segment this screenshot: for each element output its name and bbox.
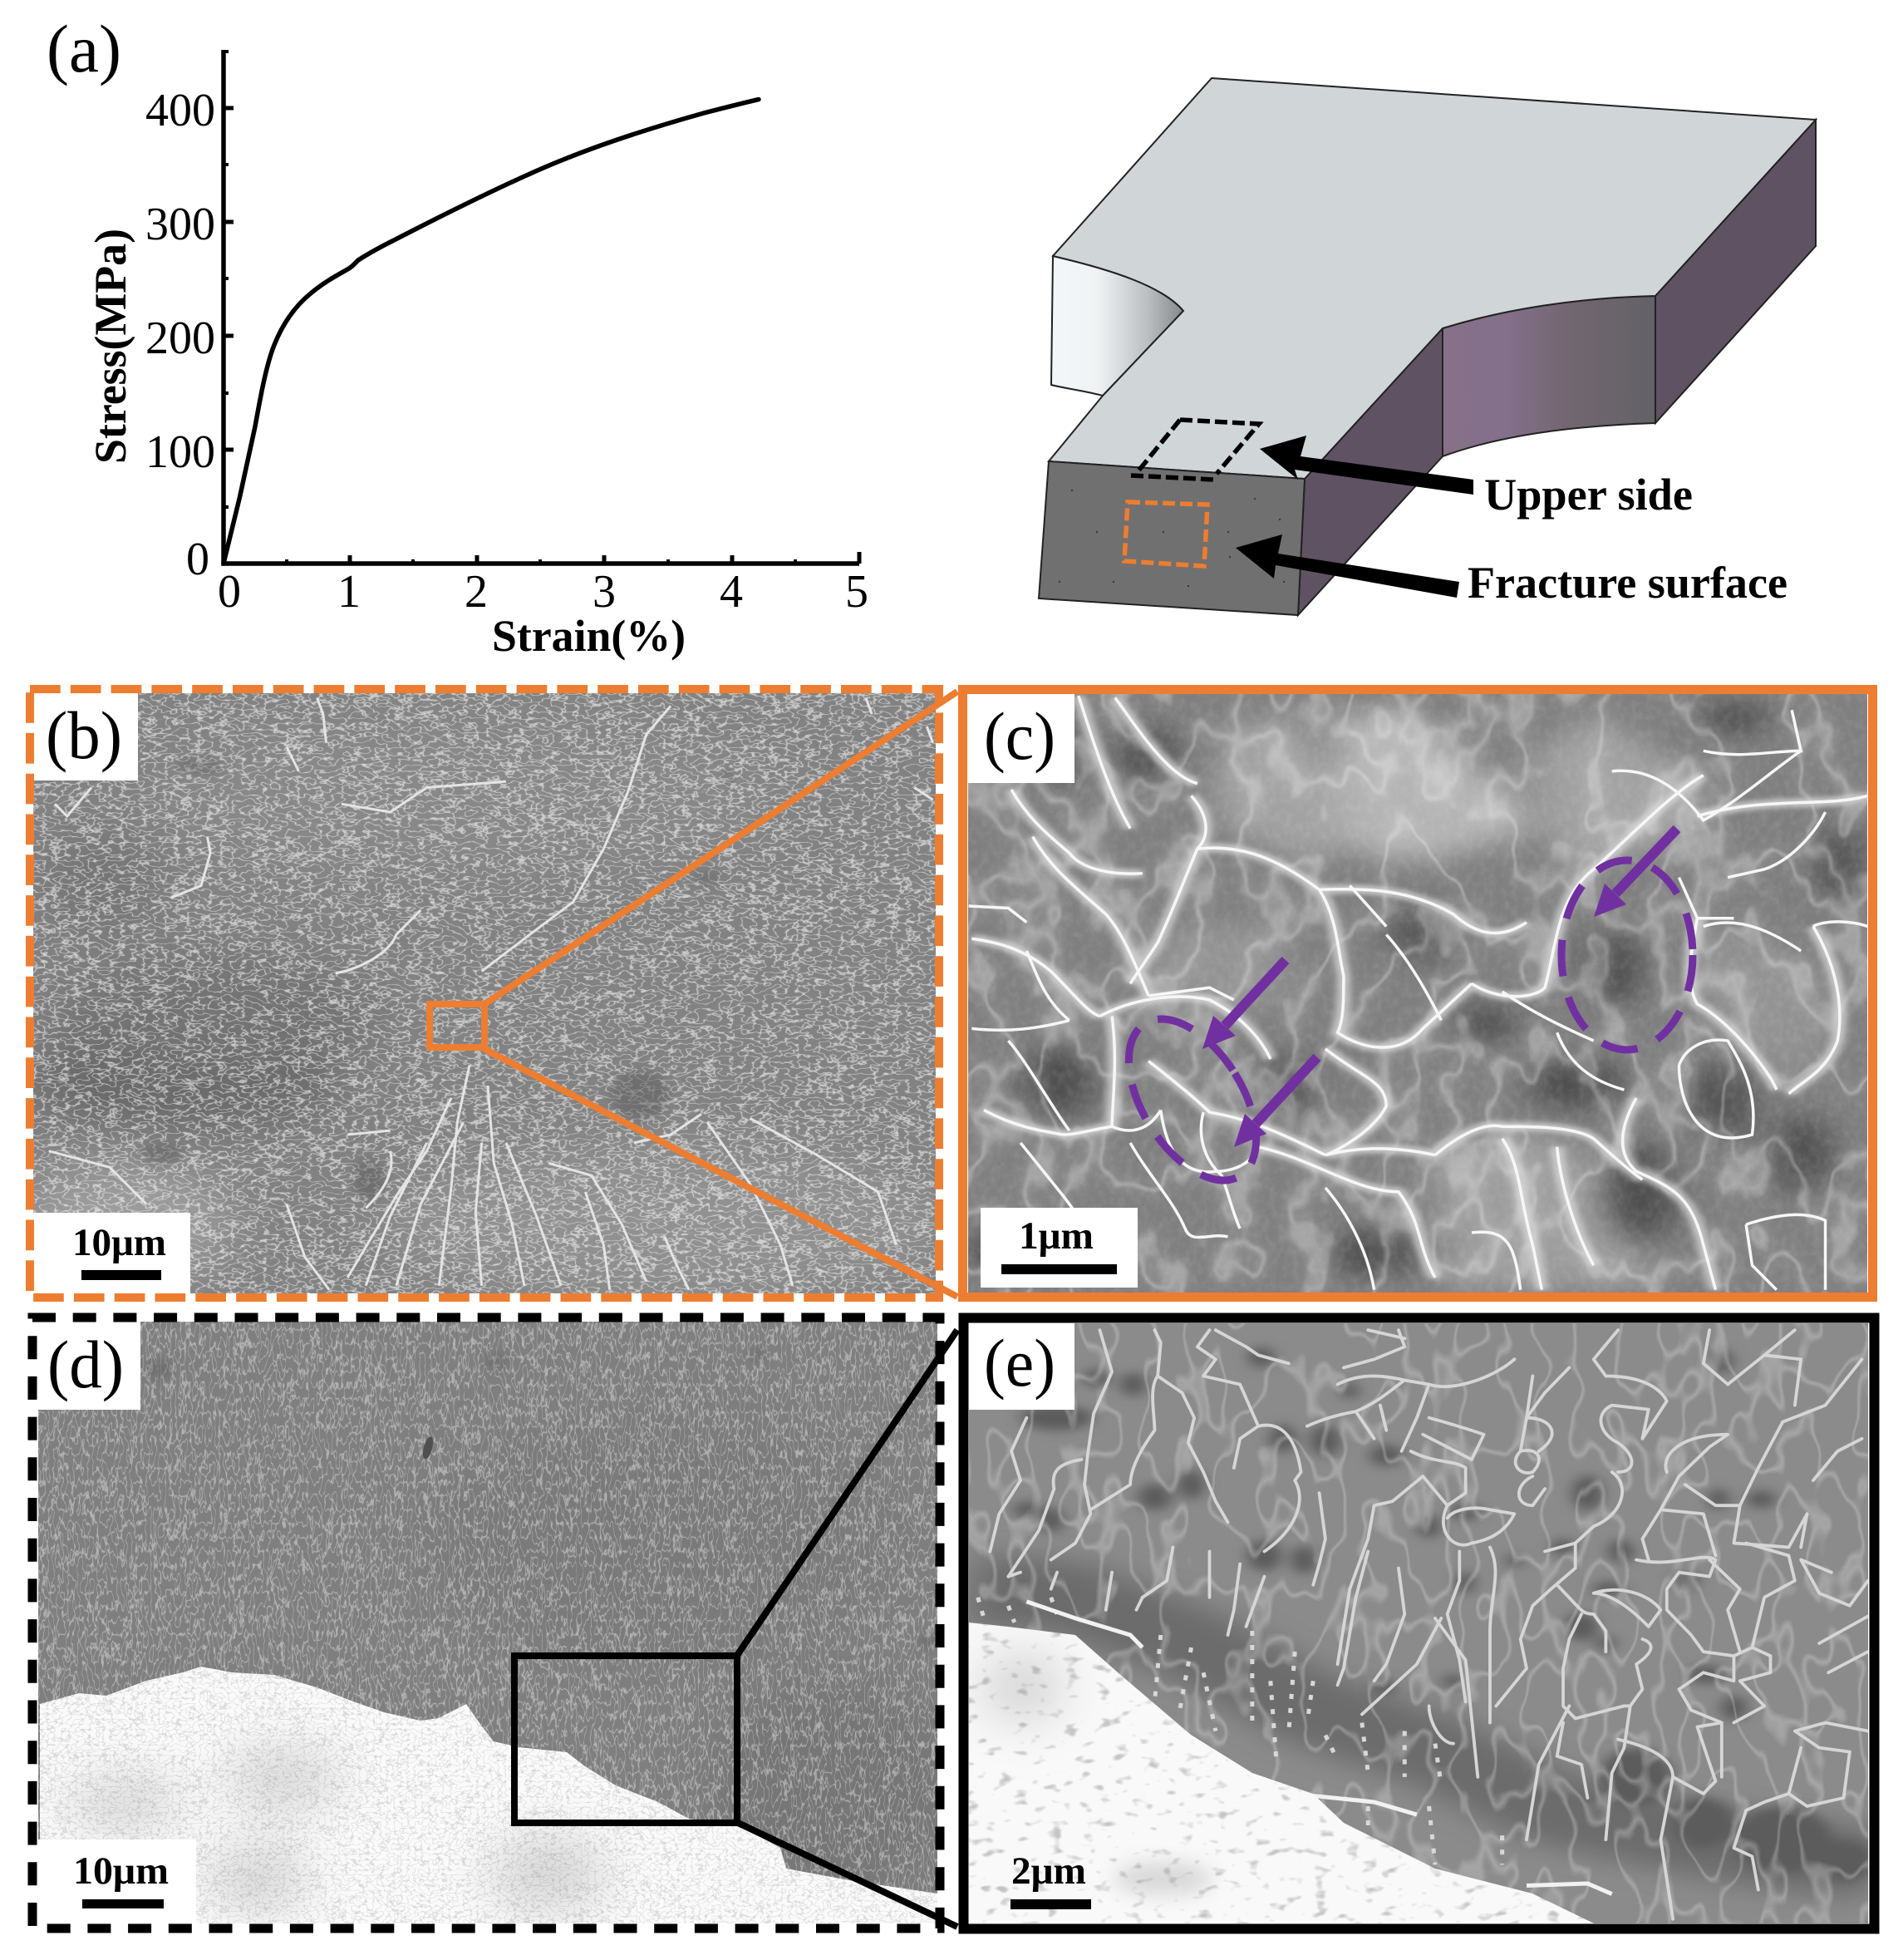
y axis tick labels: 400	[145, 85, 215, 136]
orange zoom connector lines	[484, 692, 957, 1297]
label box (c): (c)	[984, 698, 1055, 774]
x axis tick labels: 5	[845, 566, 868, 618]
y axis tick labels: 100	[145, 426, 215, 478]
fracture region texture	[38, 1654, 937, 1923]
black zoom connector lines	[738, 1330, 957, 1927]
panel: stress-strain chart	[47, 11, 868, 661]
dark band near fracture edge	[971, 1589, 1874, 1864]
droplet rows	[978, 1598, 1502, 1864]
upper side dashed region	[1131, 420, 1259, 480]
scale bar b: 10μm	[72, 1221, 166, 1264]
y axis title: Stress(MPa)	[86, 229, 135, 464]
arrow: fracture surface	[1236, 534, 1459, 598]
panel: SEM image c	[962, 690, 1873, 1297]
x axis tick labels	[218, 566, 868, 618]
black zoom box	[514, 1656, 737, 1823]
dark blotches	[1013, 1347, 1874, 1881]
dashed black frame d	[32, 1317, 940, 1928]
fine surface grain	[968, 694, 1867, 1293]
x axis tick labels: 2	[465, 566, 488, 618]
bright ridges	[49, 697, 933, 1290]
organic eutectic network	[969, 1323, 1868, 1923]
scale bar c	[981, 1208, 1138, 1288]
right side face	[1655, 120, 1816, 423]
label box (b): (b)	[46, 697, 122, 773]
x axis title: Strain(%)	[492, 611, 686, 661]
curved side wall	[1443, 296, 1655, 456]
solid black frame e	[964, 1318, 1875, 1928]
x axis tick labels: 4	[720, 566, 743, 618]
annotations: purple arrows	[1202, 829, 1677, 1147]
SEM texture c	[966, 694, 1868, 1293]
orange zoom box	[430, 1004, 484, 1047]
organic cell network	[968, 694, 1867, 1293]
notch wall	[1051, 256, 1183, 396]
scale bar d	[38, 1839, 196, 1923]
y axis tick labels: 200	[145, 313, 215, 364]
solid orange frame c	[962, 690, 1873, 1297]
label box (d): (d)	[47, 1327, 124, 1402]
bright fracture region	[40, 1667, 937, 1923]
panel: 3D specimen diagram	[1039, 78, 1816, 615]
small dark marks	[421, 1436, 435, 1460]
eutectic network	[990, 1330, 1868, 1919]
dashed orange frame b	[30, 689, 939, 1298]
SEM texture d	[38, 1322, 956, 1923]
y axis tick labels: 0	[186, 534, 209, 585]
scale bar d: 10μm	[73, 1849, 169, 1893]
panel: SEM image b	[17, 689, 957, 1298]
label box (e): (e)	[984, 1325, 1055, 1401]
label box (b)	[33, 693, 138, 781]
x axis tick labels: 1	[337, 566, 361, 618]
panel label (a): (a)	[47, 11, 121, 86]
panel: SEM image d	[32, 1317, 957, 1928]
label: fracture surface: Fracture surface	[1468, 558, 1787, 608]
ridge glow	[971, 696, 1868, 1290]
bright ridges	[969, 696, 1868, 1290]
scale bar c: 1μm	[1019, 1214, 1094, 1258]
dark cell interiors	[966, 702, 1862, 1278]
panel: SEM image e	[964, 1318, 1875, 1928]
label box (e)	[969, 1323, 1074, 1410]
crack highlights	[1026, 1602, 1612, 1894]
fracture surface face	[1039, 461, 1305, 615]
label box (d)	[38, 1322, 140, 1410]
fracture region specks	[969, 1621, 1601, 1923]
SEM texture e	[969, 1323, 1874, 1923]
y axis tick labels	[145, 85, 215, 585]
inner side face	[1298, 328, 1443, 615]
annotations: purple ellipses	[1103, 860, 1693, 1202]
scale bar e: 2μm	[1011, 1849, 1086, 1893]
fracture dashed region	[1124, 502, 1207, 566]
bright fracture region	[969, 1623, 1594, 1923]
x axis tick labels: 3	[593, 566, 616, 618]
x axis tick labels: 0	[218, 566, 241, 618]
stress-strain curve	[224, 100, 759, 564]
label: upper side: Upper side	[1484, 470, 1693, 520]
fracture surface specks	[1059, 490, 1285, 587]
top surface	[1049, 78, 1816, 479]
y axis tick labels: 300	[145, 199, 215, 250]
chart axes	[224, 50, 859, 564]
lighter lumps	[1143, 709, 1832, 1290]
scale bar b	[33, 1213, 190, 1293]
arrow: upper side	[1260, 436, 1473, 495]
dark pits and folds	[140, 760, 732, 1202]
SEM texture b	[17, 693, 947, 1297]
scale bar e	[1011, 1849, 1091, 1909]
label box (c)	[968, 694, 1074, 783]
